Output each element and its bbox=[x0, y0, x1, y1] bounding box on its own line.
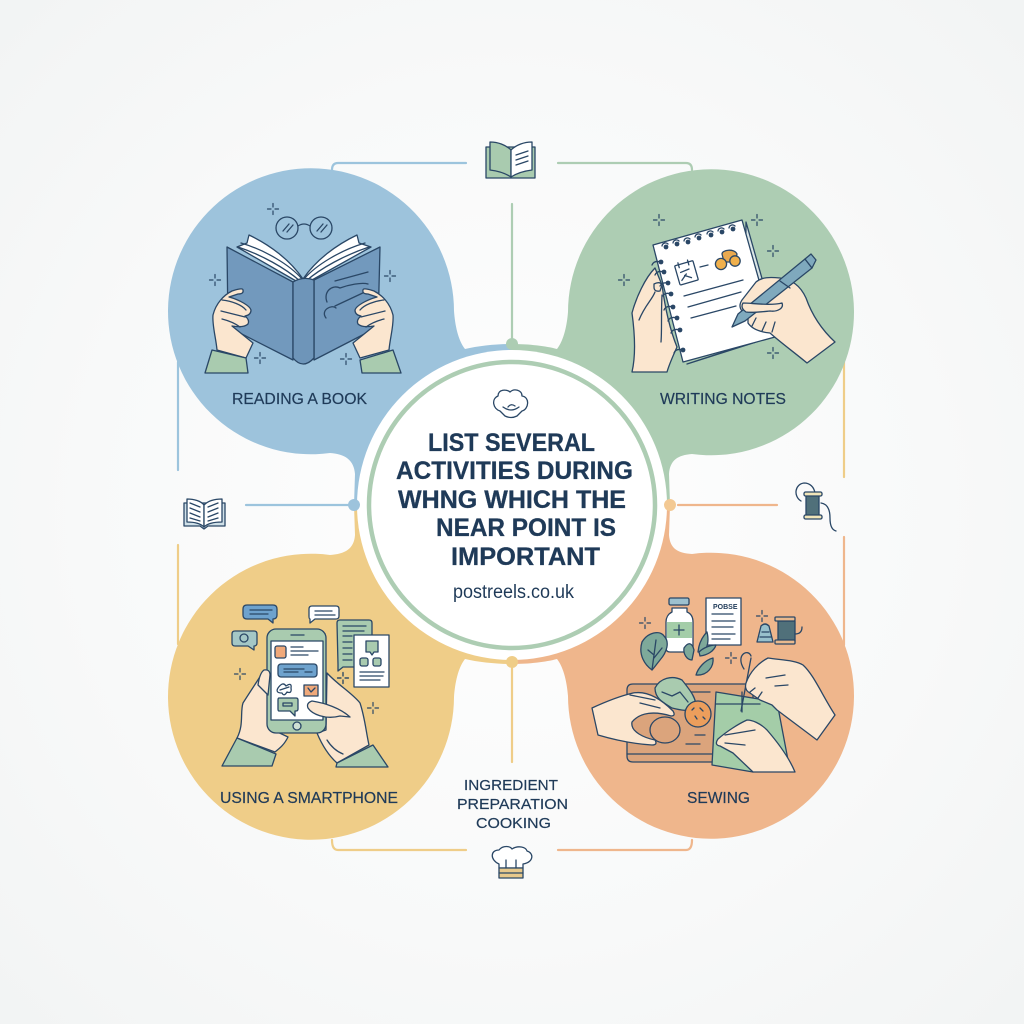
orange slice bbox=[685, 701, 711, 727]
right hand bbox=[353, 289, 393, 358]
icon: thread spool bbox=[796, 483, 836, 531]
illustration: writing in notebook bbox=[618, 214, 835, 372]
illustration: cooking and sewing: POBSE bbox=[713, 604, 738, 611]
connector lines bbox=[178, 163, 844, 850]
label: ingredient preparation cooking: COOKING bbox=[476, 815, 551, 832]
thimble and spool bbox=[757, 624, 773, 642]
glasses bbox=[276, 217, 332, 239]
left hand bbox=[632, 268, 677, 372]
icon: chef hat bottom bbox=[492, 846, 532, 878]
title: NEAR POINT IS bbox=[436, 514, 616, 542]
ring bbox=[650, 717, 680, 743]
lower right hand bbox=[716, 720, 795, 772]
phone screen bbox=[275, 646, 286, 658]
title bbox=[396, 429, 633, 571]
label: ingredient preparation cooking: PREPARATION bbox=[457, 796, 568, 813]
spiral rings bbox=[659, 227, 735, 352]
left hand bbox=[592, 693, 674, 745]
node dots bbox=[348, 338, 676, 668]
centre white circle with ring bbox=[357, 350, 667, 660]
label: writing notes: WRITING NOTES bbox=[660, 391, 786, 408]
notebook content bbox=[674, 259, 698, 285]
right sleeve bbox=[360, 350, 401, 373]
needle and thread bbox=[741, 653, 751, 711]
bottle bbox=[666, 608, 693, 652]
illustration: cooking and sewing bbox=[592, 598, 835, 772]
illustration: using a smartphone bbox=[222, 605, 389, 767]
left hand back bbox=[237, 672, 288, 752]
panel: writing notes blob bbox=[512, 169, 854, 505]
notebook bbox=[687, 222, 778, 364]
website: postreels.co.uk bbox=[453, 582, 574, 603]
cutting board bbox=[627, 684, 753, 762]
phone bbox=[267, 629, 326, 733]
leaves bbox=[641, 633, 667, 670]
panel: using a smartphone blob bbox=[168, 505, 512, 840]
icon: open book top bbox=[486, 142, 535, 178]
title: ACTIVITIES DURING bbox=[396, 457, 633, 485]
label: reading a book: READING A BOOK bbox=[232, 391, 367, 408]
documents bbox=[337, 620, 372, 671]
title: LIST SEVERAL bbox=[428, 429, 595, 457]
left sleeve bbox=[205, 350, 248, 373]
broccoli bbox=[655, 678, 696, 710]
icon: chef hat in centre bbox=[494, 390, 528, 418]
label: ingredient preparation cooking bbox=[457, 777, 568, 832]
label: ingredient preparation cooking: INGREDIENT bbox=[464, 777, 558, 794]
upper right hand bbox=[746, 658, 835, 740]
panel: reading a book blob bbox=[168, 168, 512, 505]
chat bubbles bbox=[243, 605, 277, 623]
book covers bbox=[227, 247, 293, 360]
label: sewing: SEWING bbox=[687, 790, 750, 807]
pen bbox=[732, 254, 816, 327]
thumbs bbox=[258, 670, 270, 695]
icon: open book left bbox=[184, 499, 225, 529]
panel: sewing blob bbox=[512, 505, 854, 839]
title: IMPORTANT bbox=[451, 543, 600, 571]
title: WHNG WHICH THE bbox=[398, 486, 626, 514]
recipe paper bbox=[706, 598, 741, 645]
sleeves bbox=[222, 738, 276, 766]
thumb bbox=[742, 303, 782, 312]
cloth bbox=[712, 692, 788, 772]
label: using a smartphone: USING A SMARTPHONE bbox=[220, 790, 398, 807]
illustration: hands holding book bbox=[205, 204, 401, 373]
right hand bbox=[740, 277, 835, 363]
right hand back bbox=[317, 673, 369, 763]
pages bbox=[237, 235, 371, 285]
left hand bbox=[213, 289, 253, 358]
